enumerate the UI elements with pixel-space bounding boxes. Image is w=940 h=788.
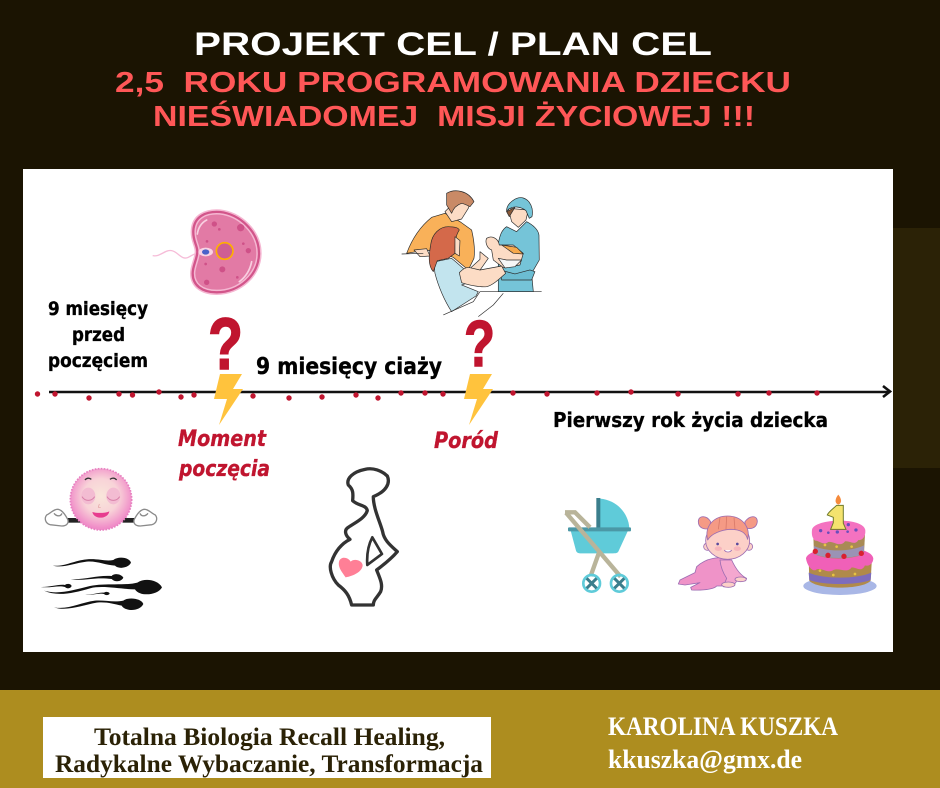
text: 9 months before conception: poczęciem [48, 350, 148, 372]
icon: meditating egg character [45, 469, 157, 530]
icon: lightning at conception [214, 374, 243, 425]
text: 9 months before conception: przed [72, 324, 125, 346]
timeline dots [35, 389, 820, 401]
text: first year of life: Pierwszy rok życia dziecka [553, 408, 828, 432]
title: PROJEKT CEL / PLAN CEL [194, 26, 712, 62]
footer label: methods [43, 717, 491, 778]
footer: author contact [608, 712, 838, 774]
icon: baby stroller [565, 498, 631, 592]
title: 2,5 ROKU PROGRAMOWANIA DZIECKU [115, 67, 791, 99]
icon: birthday cake [803, 495, 877, 595]
text: birth: Poród [434, 429, 498, 454]
icon: fertilised egg cell [153, 212, 259, 292]
text: 9 months before conception: 9 miesięcy [48, 298, 149, 320]
footer label: methods: Radykalne Wybaczanie, Transformacja [55, 751, 483, 778]
footer: author contact: kkuszka@gmx.de [608, 745, 802, 774]
text: moment of conception: poczęcia [178, 457, 270, 482]
icon: question mark at birth: ? [464, 307, 495, 380]
footer label: methods: Totalna Biologia Recall Healing, [94, 724, 445, 751]
footer band [0, 690, 940, 788]
title: NIEŚWIADOMEJ MISJI ŻYCIOWEJ !!! [153, 99, 755, 133]
icon: pregnant silhouette [330, 469, 397, 605]
icon: crawling baby [678, 516, 757, 590]
icon: question mark at conception: ? [208, 304, 243, 385]
footer: author contact: KAROLINA KUSZKA [608, 712, 838, 741]
icon: lightning at birth [464, 374, 493, 425]
icon: sperm cells [41, 558, 162, 610]
icon: family with newborn and midwife [402, 191, 542, 317]
text: 9 months of pregnancy: 9 miesięcy ciaży [256, 354, 442, 380]
title [115, 26, 791, 133]
panel: timeline [23, 169, 893, 652]
timeline arrow [49, 386, 890, 397]
text: moment of conception: Moment [178, 427, 267, 452]
text: moment of conception [178, 427, 270, 482]
text: 9 months before conception [48, 298, 149, 372]
